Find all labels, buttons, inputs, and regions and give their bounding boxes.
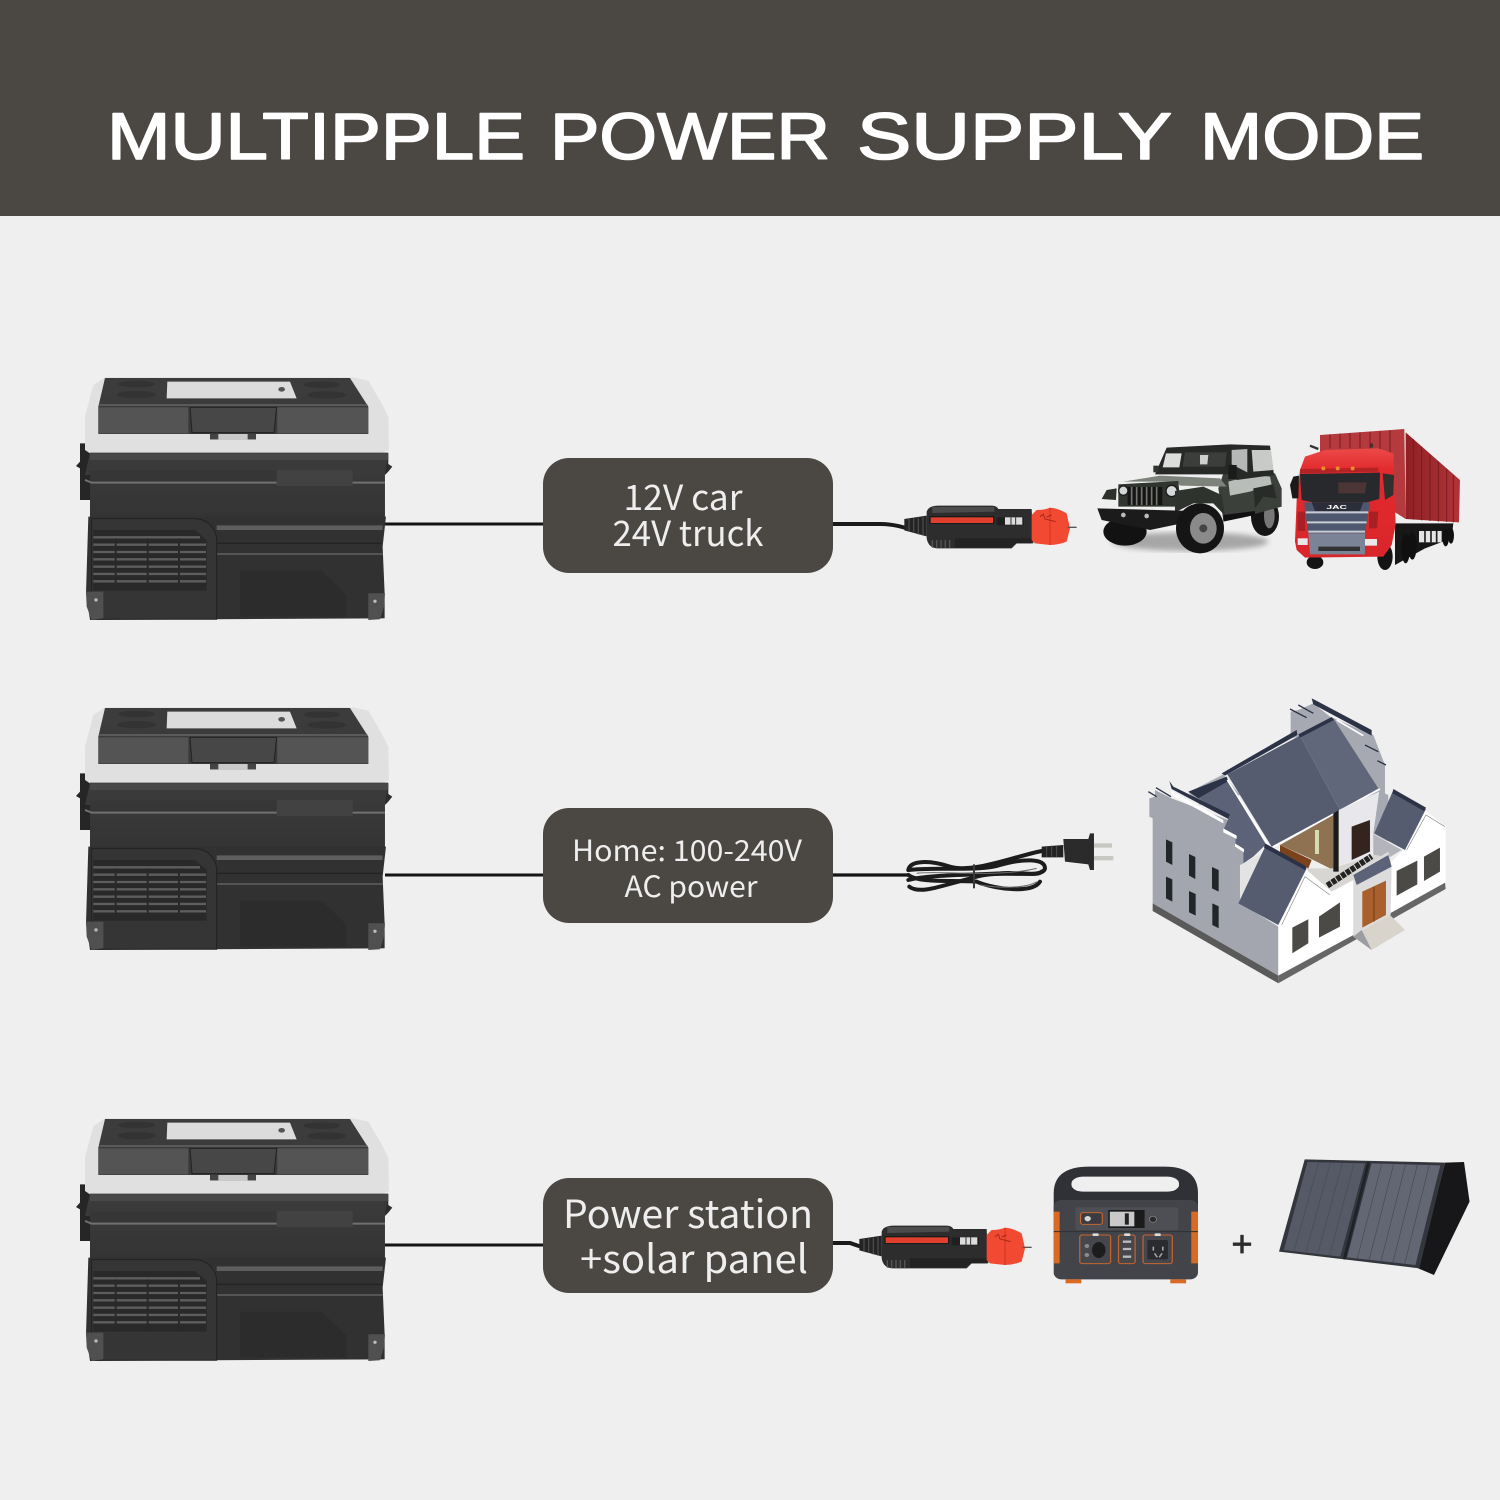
connector cable: fridge 1 to pill xyxy=(385,522,545,526)
icon: jeep xyxy=(1097,444,1282,553)
title: MODE xyxy=(1200,99,1424,173)
pill: 12V car 24V truck xyxy=(543,458,833,573)
AC power cord and plug xyxy=(833,833,1113,890)
cigarette lighter cable and plug 2 xyxy=(833,1226,1032,1268)
pill: power station and solar panel xyxy=(543,1178,833,1293)
pill: 12V car 24V truck: 24V truck xyxy=(612,506,764,557)
pill: home AC power: AC power xyxy=(624,864,758,906)
title xyxy=(107,99,1424,173)
title: POWER xyxy=(550,99,830,173)
pill: home AC power: Home: 100-240V xyxy=(572,828,802,870)
title: MULTIPPLE xyxy=(107,99,525,173)
pill: 12V car 24V truck: 12V car xyxy=(624,470,743,521)
fridge 1 xyxy=(76,377,392,620)
fridge 2 xyxy=(76,707,392,950)
icon: portable power station xyxy=(1054,1167,1198,1283)
pill: home AC power xyxy=(543,808,833,923)
pill: power station and solar panel: Power station xyxy=(563,1184,813,1240)
icon: folding solar panel xyxy=(1279,1159,1470,1275)
title: SUPPLY xyxy=(857,99,1172,173)
icon: red container truck xyxy=(1290,429,1460,570)
fridge 3 xyxy=(76,1118,392,1361)
icon: red container truck: JAC xyxy=(1326,505,1347,511)
connector cable: fridge 3 to pill xyxy=(385,1244,545,1246)
icon: house xyxy=(1148,698,1446,983)
connector cable: fridge 2 to pill xyxy=(385,874,545,876)
pill: power station and solar panel: +solar panel xyxy=(580,1229,808,1285)
cigarette lighter cable and plug xyxy=(833,506,1077,548)
plus sign: + xyxy=(1231,1223,1253,1264)
header band xyxy=(0,0,1500,216)
